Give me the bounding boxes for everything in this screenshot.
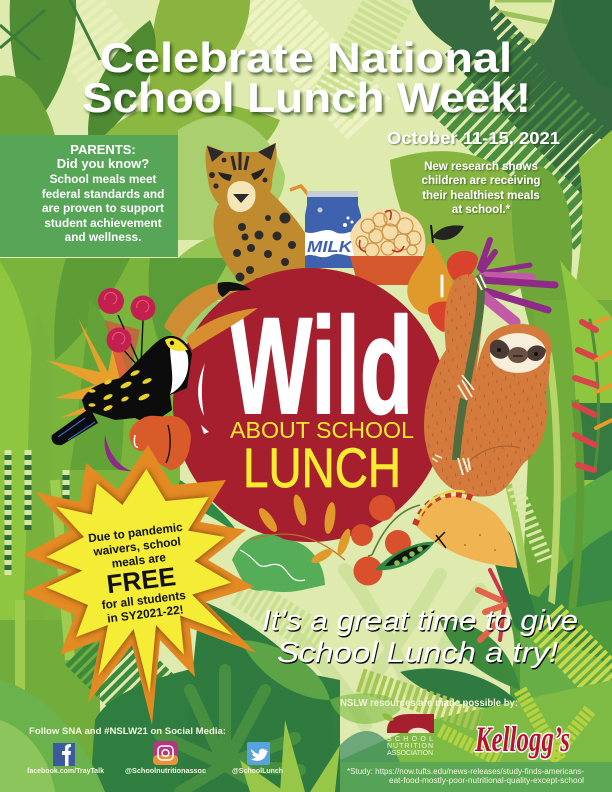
star palm [160,670,300,792]
panel: parents: PARENTS: [70,142,136,157]
illustration: tomatoes and pea pod [175,480,446,586]
sponsor credit: NSLW resources are made possible by: [340,698,518,709]
social handles: @Schoolnutritionassoc [125,766,206,775]
top right dark canopy [412,0,612,150]
callout: free meals starburst: for all students [101,588,187,612]
footnote panel: *Study: https://now.tufts.edu/news-releases/study-finds-americans- [347,767,584,776]
title: Celebrate National [100,34,512,81]
lower left jungle [0,620,100,792]
red circle badge [173,268,447,542]
illustration: pear and strawberries [407,225,478,332]
panel: parents: School meals meet [50,172,157,186]
lettering: wild about school lunch [198,290,414,499]
lettering: wild about school lunch: ABOUT SCHOOL [230,417,414,443]
social heading: Follow SNA and #NSLW21 on Social Media: [29,726,226,737]
social handles: facebook.com/TrayTalk [27,766,105,775]
logo: school nutrition association [382,713,434,757]
callout: free meals starburst: FREE [105,561,177,599]
lettering: wild about school lunch: LUNCH [243,436,401,499]
top light palm fronds [60,0,600,120]
illustration: heliconia flower [478,318,612,640]
left side grass strips [0,258,180,640]
logo: school nutrition association: NUTRITION [387,743,433,750]
illustration: noodle bowl [350,209,425,285]
illustration: cheetah [205,143,325,290]
tagline: It’s a great time to give [262,605,578,637]
callout: free meals starburst: meals are [111,550,167,571]
research note [422,161,540,216]
callout: free meals starburst: waivers, school [92,534,182,559]
right side grass strips [520,300,612,640]
research note: at school.* [452,204,511,216]
tagline: School Lunch a try! [277,637,558,669]
research note: New research shows [424,161,538,173]
right green frond [470,75,612,210]
illustration: milk carton [290,186,361,268]
illustration: orange leaf sprig and lettuce [232,493,353,592]
illustration: purple flower [480,240,555,322]
callout: free meals starburst [23,445,256,725]
illustration: red pepper [105,416,191,472]
panel: parents: student achievement [44,216,162,230]
date: October 11-15, 2021 [387,128,560,148]
panel: parents: federal standards and [42,187,164,201]
illustration: sloth [424,274,552,497]
social handles [27,766,283,775]
logo: school nutrition association: ASSOCIATION [387,750,433,757]
illustration: milk carton: MILK [307,239,354,256]
footnote panel: eat-food-mostly-poor-nutritional-quality-except-school [389,776,584,785]
lettering: wild about school lunch: Wild [230,290,413,443]
icon: instagram [153,741,178,765]
research note: their healthiest meals [422,190,540,202]
tagline [262,605,578,669]
callout: free meals starburst: Due to pandemic [87,520,184,545]
footnote panel [340,762,612,792]
centre lighter leaves [390,151,541,300]
light centre lower [230,545,514,740]
lower right leaves [400,668,520,708]
title: School Lunch Week! [82,74,531,121]
illustration: toucan [52,282,258,445]
panel: parents: Did you know? [57,156,149,171]
icon: twitter [247,742,270,765]
icon: facebook [53,743,75,766]
panel: parents: are proven to support [42,201,164,215]
illustration: orange leaves and berries [46,288,156,418]
illustration: taco [415,491,517,568]
callout: free meals starburst: in SY2021-22! [106,602,184,626]
panel: parents: and wellness. [65,230,141,244]
logo: kellogg's: Kellogg’s [474,719,570,759]
top left leaves [10,0,76,130]
social handles: @SchoolLunch [232,766,283,775]
panel: parents [0,135,178,257]
logo: school nutrition association: SCHOOL [387,736,433,743]
research note: children are receiving [422,175,540,187]
title [82,34,531,121]
